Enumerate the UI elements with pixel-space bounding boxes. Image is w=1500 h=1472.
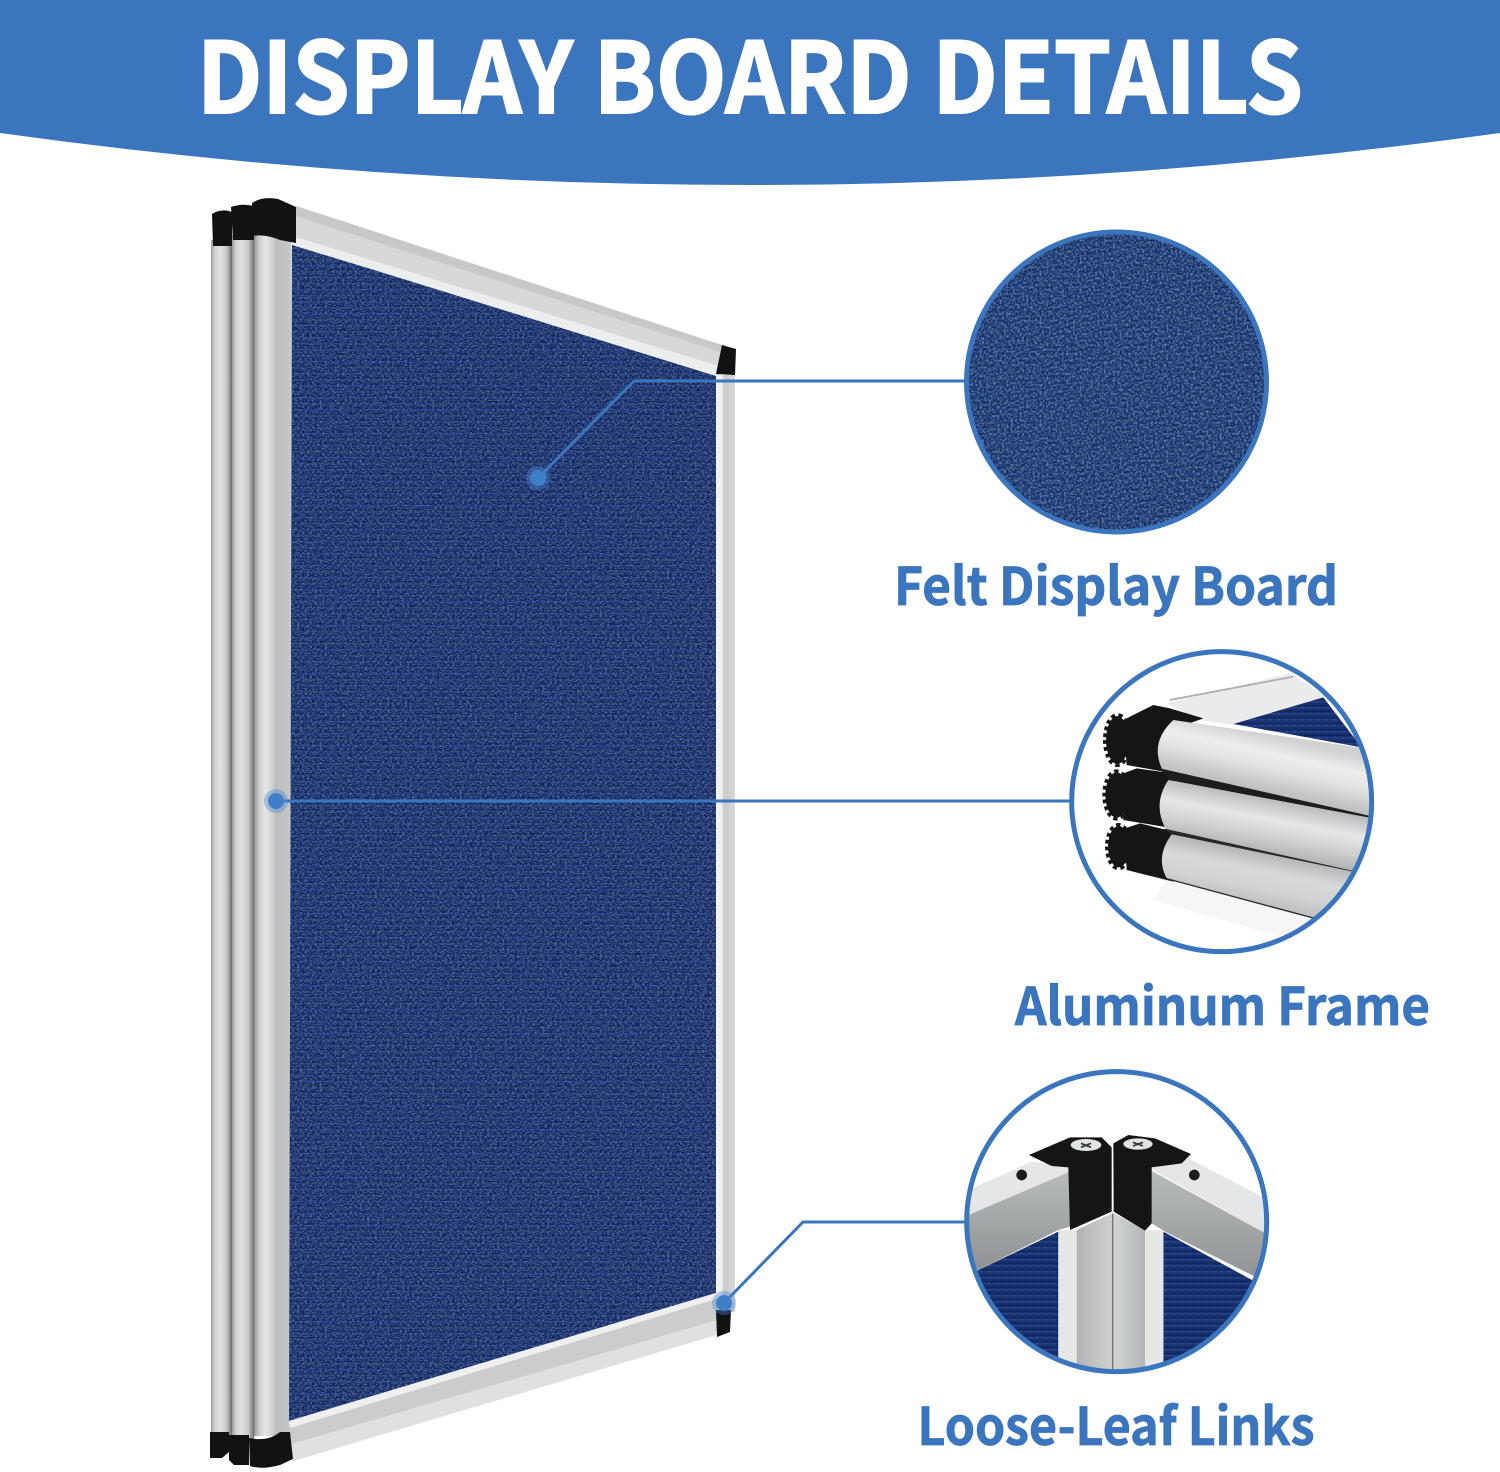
top frame rail — [291, 206, 722, 376]
detail circle: felt close-up — [966, 232, 1266, 532]
center fold seam — [292, 800, 716, 802]
callout leader: aluminum frame — [264, 789, 1071, 813]
label: loose-leaf links: Loose-Leaf Links — [918, 1385, 1314, 1460]
felt surface — [289, 245, 716, 1421]
right aluminum rail — [1152, 1158, 1264, 1276]
title: DISPLAY BOARD DETAILS — [197, 0, 1303, 142]
upper rail and felt — [1167, 673, 1362, 747]
callout leader: loose-leaf links — [712, 1222, 966, 1315]
stacked tubes — [1158, 720, 1377, 930]
felt panels — [978, 1232, 1058, 1358]
label: aluminum frame: Aluminum Frame — [1014, 965, 1430, 1040]
black hinge brackets — [1029, 1135, 1191, 1231]
detail circle: loose-leaf links close-up — [967, 1072, 1268, 1375]
black knurled end caps — [1105, 705, 1203, 882]
callout leader: felt display board — [526, 381, 966, 490]
right frame rail — [716, 375, 735, 1312]
vertical hinge post — [1058, 1213, 1163, 1375]
detail circle: aluminum frame close-up — [1072, 652, 1377, 952]
bottom frame rail — [289, 1293, 719, 1461]
screws — [1071, 1138, 1153, 1151]
left aluminum rail — [968, 1162, 1070, 1270]
label: felt display board: Felt Display Board — [894, 545, 1338, 620]
header banner — [0, 0, 1500, 185]
folded display board — [210, 198, 736, 1468]
black corner caps — [210, 198, 736, 1468]
left folded poles — [211, 235, 292, 1440]
